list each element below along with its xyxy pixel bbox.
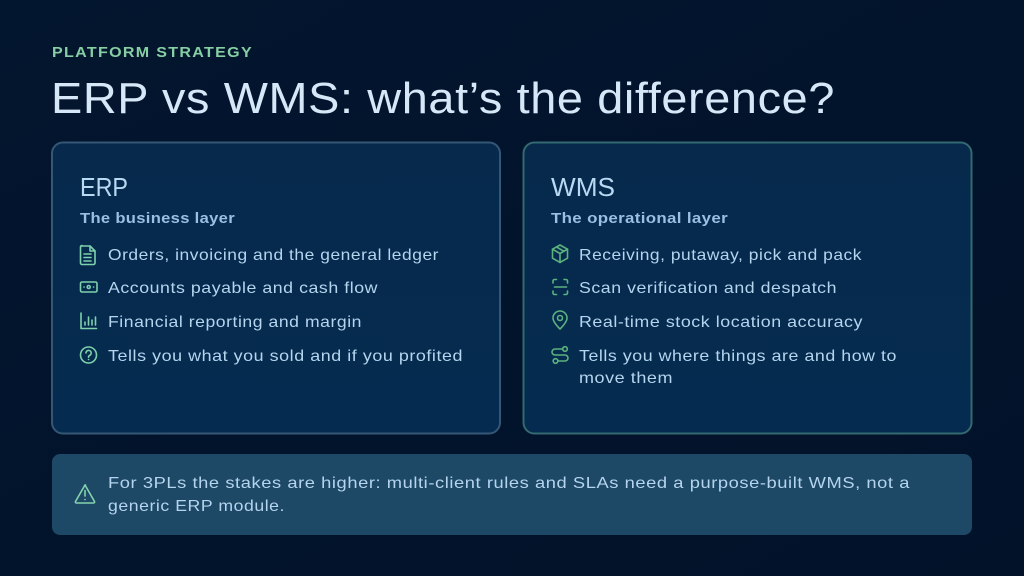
- callout text: generic ERP module.: [108, 498, 285, 515]
- title: ERP vs WMS: what’s the difference?: [51, 74, 835, 123]
- icon: box: [552, 245, 568, 262]
- icon: document: [80, 246, 95, 264]
- item: tells where: [579, 348, 897, 387]
- icon: scan: [553, 280, 568, 294]
- icon: location pin: [553, 311, 567, 329]
- callout text: [108, 475, 910, 515]
- item: tells where: Tells you where things are and how to: [579, 348, 897, 365]
- ERP heading: ERP: [80, 172, 128, 202]
- panel: ERP: [52, 142, 500, 434]
- item: orders: Orders, invoicing and the general ledger: [108, 247, 439, 264]
- item: tells: Tells you what you sold and if you profited: [108, 348, 463, 365]
- ERP subheading: The business layer: [80, 210, 235, 227]
- icon: route: [552, 347, 568, 363]
- icon: warning: [75, 485, 95, 503]
- WMS subheading: The operational layer: [551, 210, 728, 227]
- item: tells where: move them: [579, 370, 673, 387]
- panel: WMS: [524, 142, 972, 434]
- icon: question: [80, 347, 96, 363]
- item: receiving: Receiving, putaway, pick and pack: [579, 247, 863, 264]
- item: financial: Financial reporting and margin: [108, 314, 362, 331]
- callout text: For 3PLs the stakes are higher: multi-client rules and SLAs need a purpose-built WMS, not a: [108, 475, 910, 492]
- item: location: Real-time stock location accuracy: [579, 314, 863, 331]
- WMS heading: WMS: [551, 172, 615, 202]
- icon: bar chart: [81, 313, 96, 328]
- eyebrow label: PLATFORM STRATEGY: [52, 45, 253, 61]
- item: scan: Scan verification and despatch: [579, 280, 837, 297]
- item: accounts: Accounts payable and cash flow: [108, 280, 378, 297]
- callout: [52, 454, 972, 535]
- icon: banknote: [80, 282, 97, 292]
